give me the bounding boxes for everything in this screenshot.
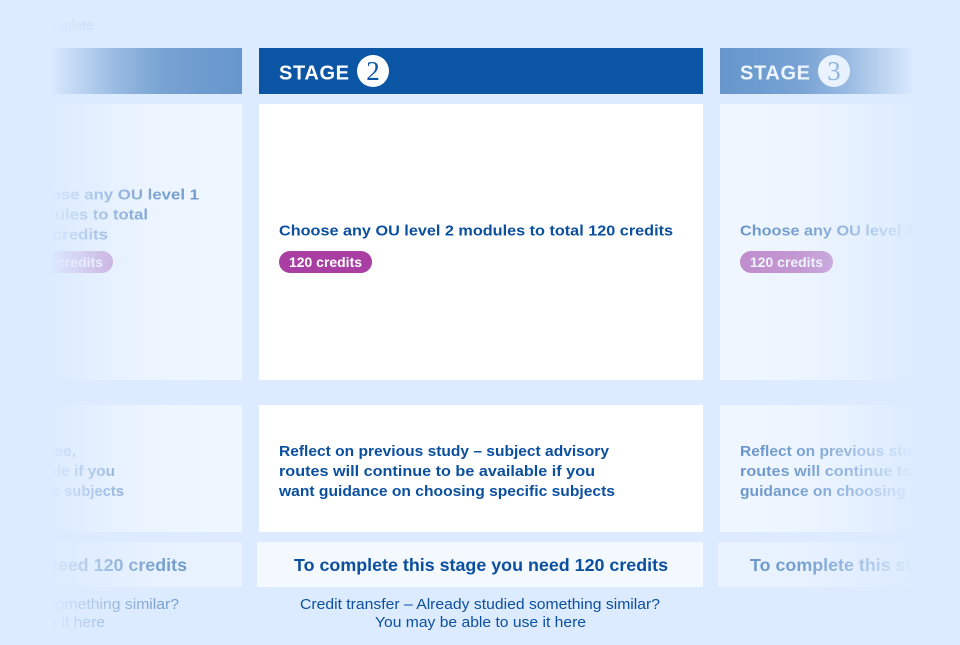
stage 1 advice text: specific subjects [5,483,124,500]
stage 2 credit transfer note: You may be able to use it here [375,614,586,631]
panel: stage 2 column [257,48,703,631]
stage 2 number badge: 2 [366,56,380,86]
stage 1 advice text: available if you [5,463,115,480]
stage 2 advice card [259,405,703,532]
stage 1 completion bar [0,542,242,587]
stage 3 number badge: 3 [827,56,841,86]
stage 2 modules text: Choose any OU level 2 modules to total 120 credits [279,222,673,240]
stage 1 credits pill: 120 credits [30,254,103,270]
left fade overlay [0,0,242,645]
stage 2 completion bar [257,542,703,587]
stage 2 advice text: Reflect on previous study – subject advisory [279,443,610,460]
stage 3 number badge [818,55,850,87]
stage 2 number badge [357,55,389,87]
stage 1 modules text: modules to total [20,206,148,224]
stage 2 credits pill [279,251,372,273]
stage 2 credits pill: 120 credits [289,254,362,270]
stage 2 credit transfer note: Credit transfer – Already studied something similar? [300,596,660,613]
stage 2 advice text: routes will continue to be available if you [279,463,595,480]
stage 1 advice card [0,405,242,532]
stage 3 completion bar [718,542,960,587]
stage 1 header bar [0,48,242,94]
panel: stage 1 column [0,48,242,631]
stage 3 header bar [720,48,960,94]
stage 3 credits pill: 120 credits [750,254,823,270]
stage 3 modules card [720,104,960,380]
stage 2 completion text: To complete this stage you need 120 credits [294,555,668,575]
stage 3 label: STAGE [740,62,810,84]
stage 2 label: STAGE [279,62,349,84]
right fade overlay [718,0,960,645]
stage 1 credits pill [20,251,113,273]
stage 1 modules text [18,186,199,244]
stage 1 advice text: degree, [20,443,76,460]
stage 3 credits pill [740,251,833,273]
stage 1 modules card [0,104,242,380]
stage 2 credit transfer note [300,596,660,631]
stage 3 advice text [740,443,960,500]
stage 2 advice text: want guidance on choosing specific subjects [278,483,615,500]
panel: stage 3 column [718,48,960,587]
stage 1 credit transfer note [0,596,179,631]
stage 1 modules text: Choose any OU level 1 [18,186,199,204]
stage 2 modules card [259,104,703,380]
stage 2 header bar [259,48,703,94]
heading: complete: Complete [35,17,94,34]
stage 1 advice text [5,443,124,500]
stage 3 advice card [720,405,960,532]
stage 1 modules text: 120 credits [20,226,108,244]
stage 2 advice text [278,443,615,500]
